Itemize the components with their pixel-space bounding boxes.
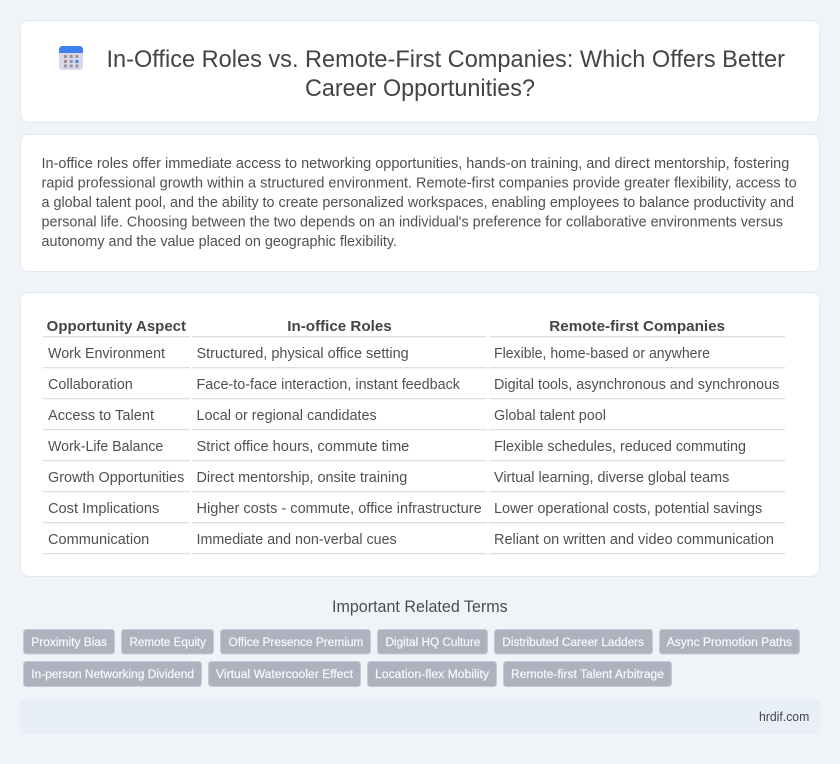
panel: intro paragraph: autonomy and the value placed on geographic flexibility. bbox=[42, 234, 397, 250]
row: growth opportunities bbox=[48, 470, 729, 486]
panel: intro paragraph: In-office roles offer immediate access to networking opportunities, hands-on training, and direct mentorship, fostering bbox=[42, 156, 789, 172]
row: growth opportunities: Growth Opportunities bbox=[48, 470, 184, 486]
row: work environment: Work Environment bbox=[48, 346, 165, 362]
tag list: related terms: Async Promotion Paths bbox=[667, 635, 792, 649]
row: cost implications: Lower operational costs, potential savings bbox=[494, 501, 762, 517]
tag list: related terms: In-person Networking Dividend bbox=[31, 667, 194, 681]
row: collaboration: Face-to-face interaction, instant feedback bbox=[196, 377, 461, 393]
tag list: related terms: Office Presence Premium bbox=[228, 635, 363, 649]
row: cost implications bbox=[48, 501, 762, 517]
row: work-life balance: Work-Life Balance bbox=[48, 439, 163, 455]
row: cost implications: Higher costs - commute, office infrastructure bbox=[196, 501, 482, 517]
title: Career Opportunities? bbox=[305, 75, 535, 102]
panel: comparison table bbox=[20, 292, 820, 576]
row: work-life balance: Flexible schedules, reduced commuting bbox=[494, 439, 746, 455]
heading: important related terms: Important Related Terms bbox=[332, 598, 508, 616]
row: growth opportunities: Direct mentorship, onsite training bbox=[196, 470, 407, 486]
row: collaboration bbox=[48, 377, 779, 393]
row: communication: Reliant on written and video communication bbox=[494, 532, 774, 548]
tag list: related terms: Remote Equity bbox=[130, 635, 207, 649]
row: communication: Immediate and non-verbal cues bbox=[196, 532, 397, 548]
icon: calendar bbox=[59, 46, 83, 70]
table header row: Opportunity Aspect bbox=[47, 319, 186, 335]
title bbox=[106, 46, 785, 102]
tag list: related terms: Proximity Bias bbox=[31, 635, 107, 649]
table header row: Remote-first Companies bbox=[549, 319, 725, 335]
tag list: related terms: Location-flex Mobility bbox=[375, 667, 490, 681]
title: In-Office Roles vs. Remote-First Companies: Which Offers Better bbox=[106, 46, 785, 73]
row: collaboration: Digital tools, asynchronous and synchronous bbox=[494, 377, 779, 393]
footer bbox=[20, 700, 820, 734]
row: work environment bbox=[48, 346, 710, 362]
row: access to talent bbox=[48, 408, 606, 424]
panel: header bbox=[20, 20, 820, 122]
tag list: related terms: Distributed Career Ladders bbox=[502, 635, 644, 649]
row: communication bbox=[48, 532, 774, 548]
tag list: related terms bbox=[24, 630, 800, 686]
row: work environment: Structured, physical office setting bbox=[196, 346, 409, 362]
row: work-life balance bbox=[48, 439, 746, 455]
tag list: related terms: Virtual Watercooler Effect bbox=[216, 667, 354, 681]
row: cost implications: Cost Implications bbox=[48, 501, 159, 517]
tag list: related terms: Remote-first Talent Arbitrage bbox=[511, 667, 664, 681]
row: communication: Communication bbox=[48, 532, 149, 548]
panel: intro paragraph: personal life. Choosing between the two depends on an individual's preference for collaborative environments versus bbox=[42, 214, 783, 230]
table header row bbox=[47, 319, 725, 335]
row: collaboration: Collaboration bbox=[48, 377, 133, 393]
panel: intro paragraph bbox=[20, 134, 820, 272]
tag list: related terms: Digital HQ Culture bbox=[386, 635, 481, 649]
row: work environment: Flexible, home-based or anywhere bbox=[494, 346, 710, 362]
panel: intro paragraph: rapid professional growth within a structured environment. Remote-first companies provide greater flexibility, access to bbox=[42, 176, 797, 192]
row: access to talent: Access to Talent bbox=[48, 408, 154, 424]
table header row: In-office Roles bbox=[287, 319, 392, 335]
panel: intro paragraph: a global talent pool, and the ability to create personalized workspaces, enabling employees to balance productivity and bbox=[42, 195, 794, 211]
row: access to talent: Local or regional candidates bbox=[196, 408, 377, 424]
row: growth opportunities: Virtual learning, diverse global teams bbox=[494, 470, 729, 486]
footer: hrdif.com bbox=[759, 710, 809, 724]
row: work-life balance: Strict office hours, commute time bbox=[196, 439, 409, 455]
row: access to talent: Global talent pool bbox=[494, 408, 606, 424]
